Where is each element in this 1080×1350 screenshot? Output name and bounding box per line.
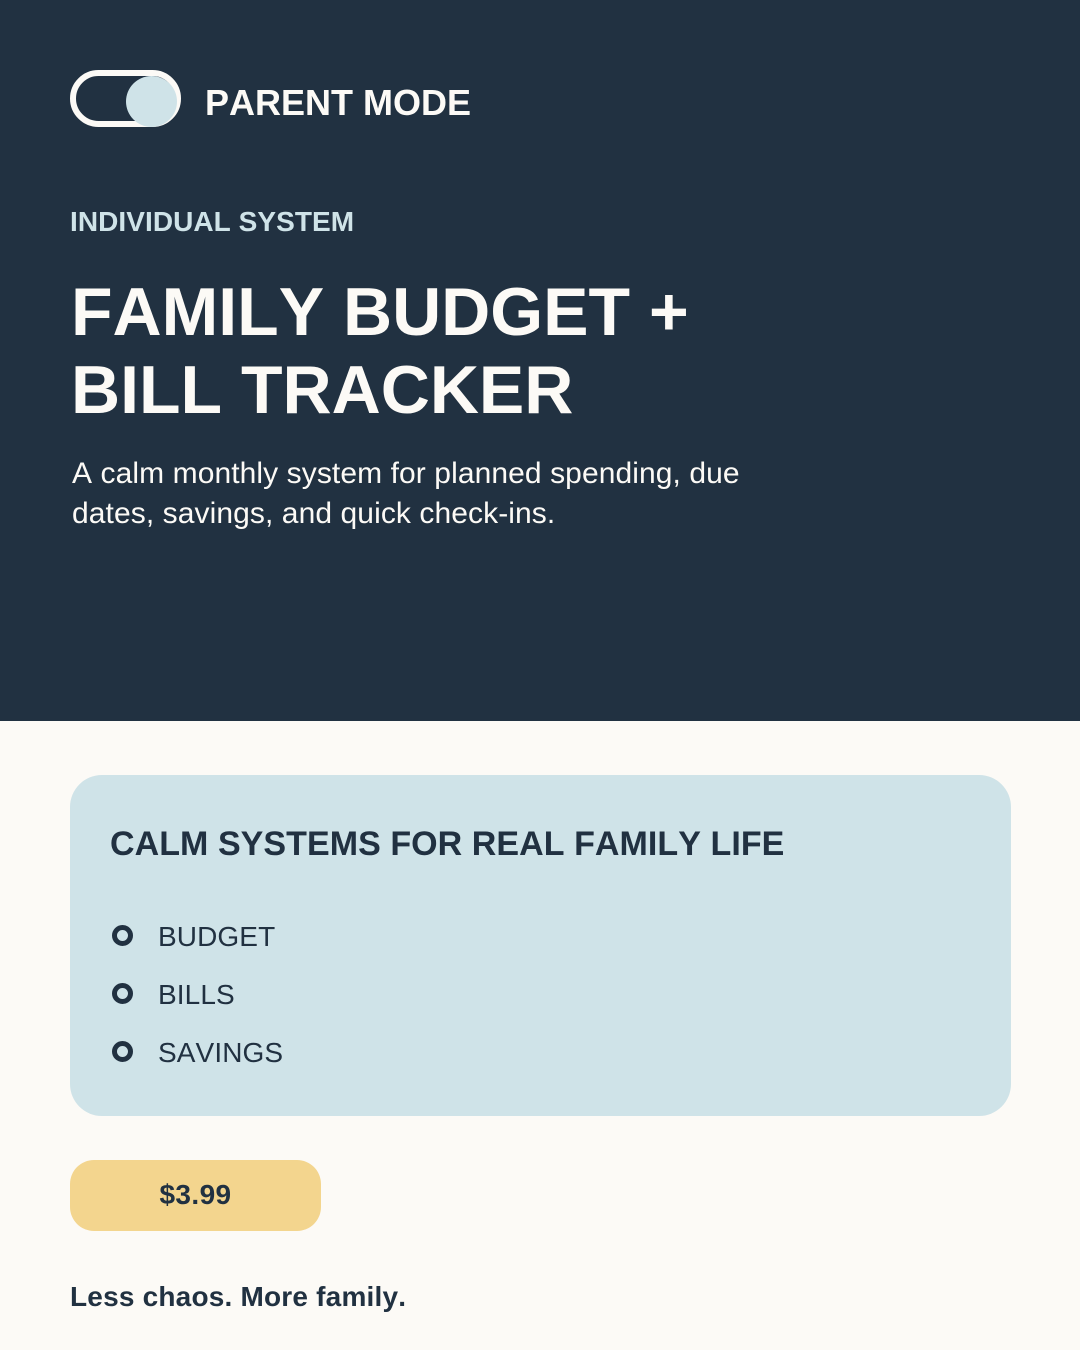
subtitle: dates, savings, and quick check-ins. <box>72 497 555 530</box>
list item: savings <box>112 1037 283 1068</box>
icon: bullet ring <box>112 925 133 946</box>
price badge <box>70 1160 321 1231</box>
icon: bullet ring <box>112 1041 133 1062</box>
tagline: Less chaos. More family. <box>70 1281 406 1312</box>
title: BILL TRACKER <box>71 352 573 428</box>
label: bills: BILLS <box>158 979 235 1010</box>
price badge: $3.99 <box>159 1179 232 1210</box>
label: budget: BUDGET <box>158 921 275 952</box>
eyebrow: INDIVIDUAL SYSTEM <box>70 206 354 237</box>
list item: budget <box>112 921 275 952</box>
label: savings: SAVINGS <box>158 1037 283 1068</box>
title: FAMILY BUDGET + <box>71 274 689 350</box>
toggle label: PARENT MODE <box>205 82 471 123</box>
panel heading: CALM SYSTEMS FOR REAL FAMILY LIFE <box>110 825 784 863</box>
title <box>71 274 689 428</box>
list item: bills <box>112 979 235 1010</box>
subtitle: A calm monthly system for planned spending, due <box>72 457 740 490</box>
header panel <box>0 0 1080 721</box>
panel: calm systems <box>70 775 1011 1116</box>
icon: bullet ring <box>112 983 133 1004</box>
subtitle <box>72 457 740 530</box>
icon: toggle switch <box>70 70 181 127</box>
